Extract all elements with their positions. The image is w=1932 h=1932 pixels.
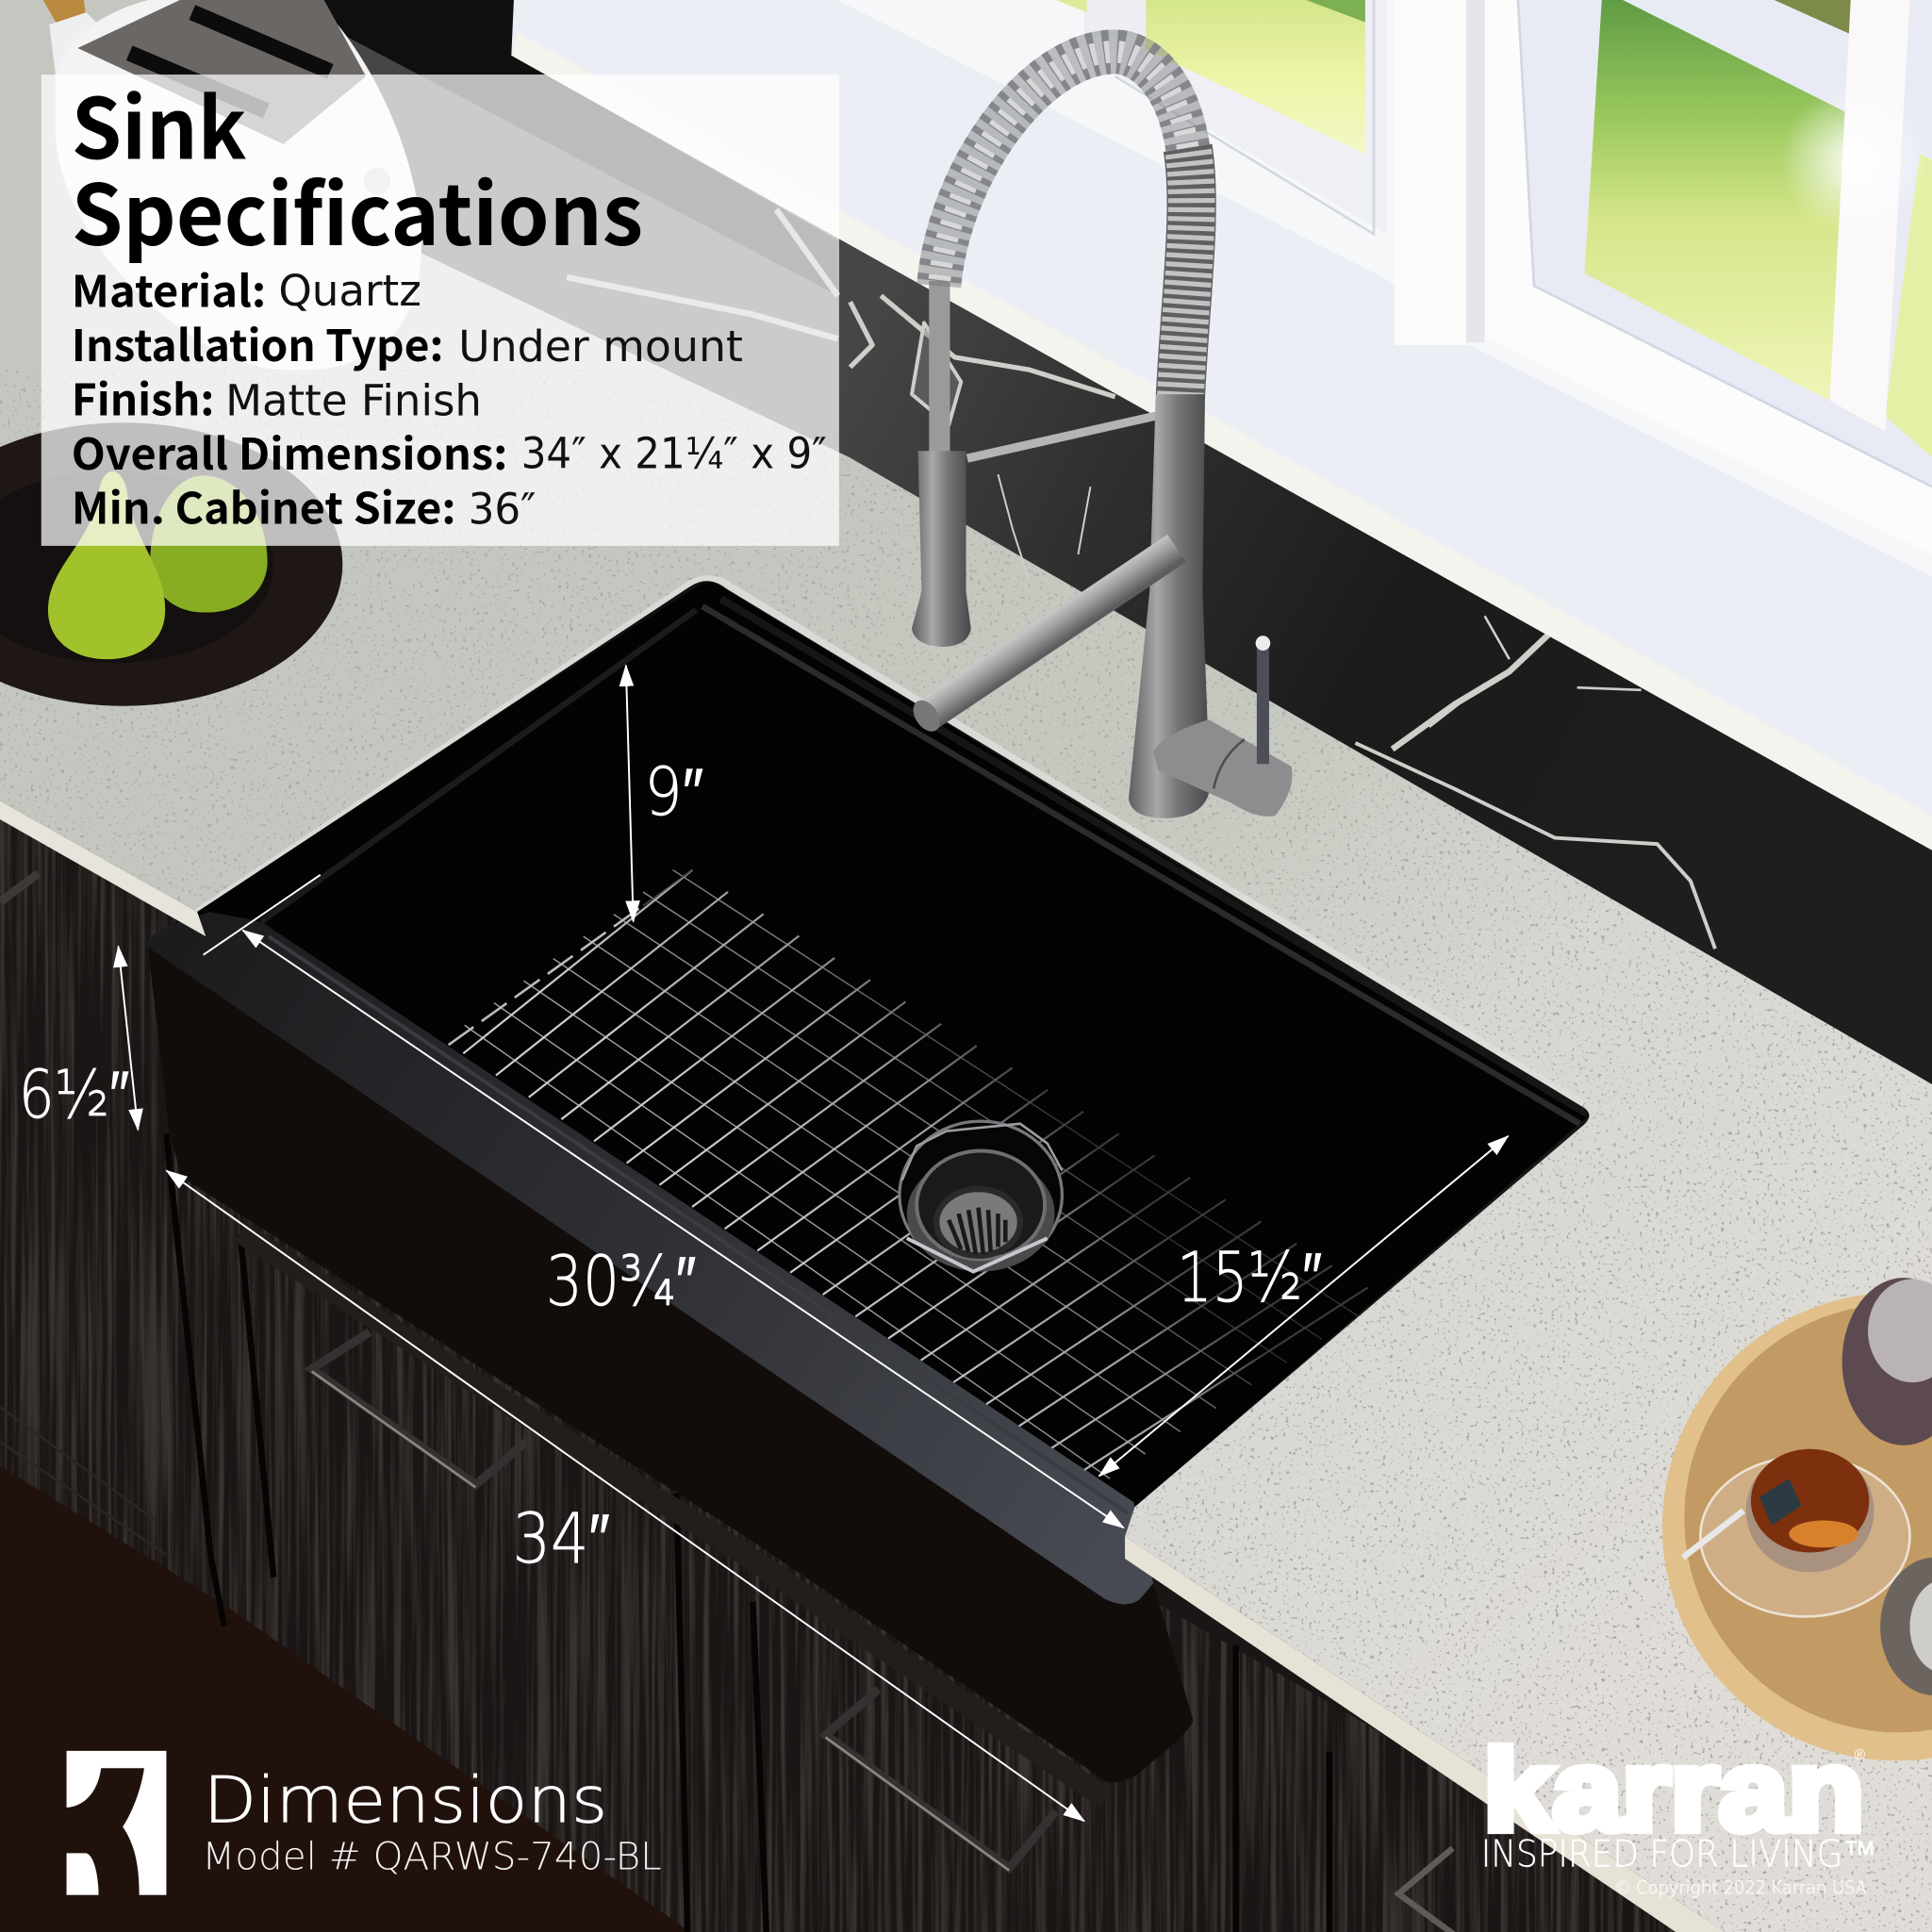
spec list: Overall Dimensions: [72,421,507,483]
dimension: 15 and a half inch width: 15½″ [1177,1238,1322,1318]
title: dimensions: Dimensions [204,1764,607,1839]
floor [0,1466,690,1932]
dimension: 30 and three quarter inch length: 30¾″ [546,1242,696,1322]
faucet [908,52,1292,818]
faucet hose [929,281,950,454]
faucet support arm [967,414,1164,458]
spec list: 34″ x 21¼″ x 9″ [521,429,827,479]
saucer [1700,1457,1909,1616]
sink rim [146,912,1153,1604]
tea tray [1662,1278,1932,1760]
heading: Specifications [72,148,643,270]
spec list: Min. Cabinet Size: [72,474,456,537]
pear back [150,475,268,613]
handle: drawer one [312,1332,526,1487]
backsplash marble [185,0,1932,1084]
title: dimensions: Model # QARWS-740-BL [202,1833,662,1878]
brand logo: karran: © Copyright 2022 Karran USA [1614,1876,1867,1898]
pear front [48,471,165,659]
dimension: 34 inch overall [166,1170,1084,1821]
faucet mixer body [1153,719,1292,817]
wire grid [449,870,1368,1478]
spec list: Quartz [278,266,421,316]
heading: Sink [72,62,247,184]
brand logo: karran: INSPIRED FOR LIVING™ [1481,1834,1876,1876]
brand logo: karran: karran [1483,1726,1864,1855]
brand logo: karran [1481,1726,1876,1898]
faucet spout [908,549,1177,736]
cabinets [0,764,1676,1932]
spec list: Material: [72,257,266,320]
dimension: 30 and three quarter inch length [204,875,1124,1527]
faucet sprayer head [912,451,971,647]
faucet spring coil [939,52,1192,397]
dimension: 9 inch depth: 9″ [644,753,703,831]
dimension: 34 inch overall: 34″ [513,1499,610,1579]
spoon [1683,1511,1743,1558]
apron sink front [148,947,1193,1782]
spec list: Finish: [72,366,214,428]
window panes [1146,0,1365,154]
plate with pears [0,422,342,706]
dimension: 6 and a half inch apron: 6½″ [19,1056,129,1133]
drain [900,1121,1062,1272]
window sill [511,0,1932,850]
heading [72,62,643,270]
dimension: 9 inch depth [626,666,703,921]
title: dimensions [202,1764,662,1878]
dimension: 6 and a half inch apron [19,947,138,1133]
spec list: Matte Finish [225,375,482,425]
teapot [1842,1278,1932,1445]
brand logo: karran: ® [1855,1747,1866,1763]
icon: karran K mark [67,1751,166,1895]
handle: drawer two [826,1690,1056,1871]
handle: drawer three [1398,1848,1454,1932]
marble veins [567,209,1715,949]
dimension: 15 and a half inch width [1099,1136,1508,1476]
spec list [72,257,827,537]
spec list: Installation Type: [72,312,443,374]
window frame [838,0,1932,577]
jar [1880,1558,1932,1695]
toaster and utensil holder [43,0,421,371]
spec list: Under mount [458,322,743,372]
faucet column [1129,394,1210,818]
handle: left door [0,873,39,902]
sink basin [173,579,1590,1507]
faucet lever [1256,636,1270,764]
panel: sink specifications [41,62,839,546]
cup of tea [1746,1449,1874,1572]
spec list: 36″ [469,484,536,534]
